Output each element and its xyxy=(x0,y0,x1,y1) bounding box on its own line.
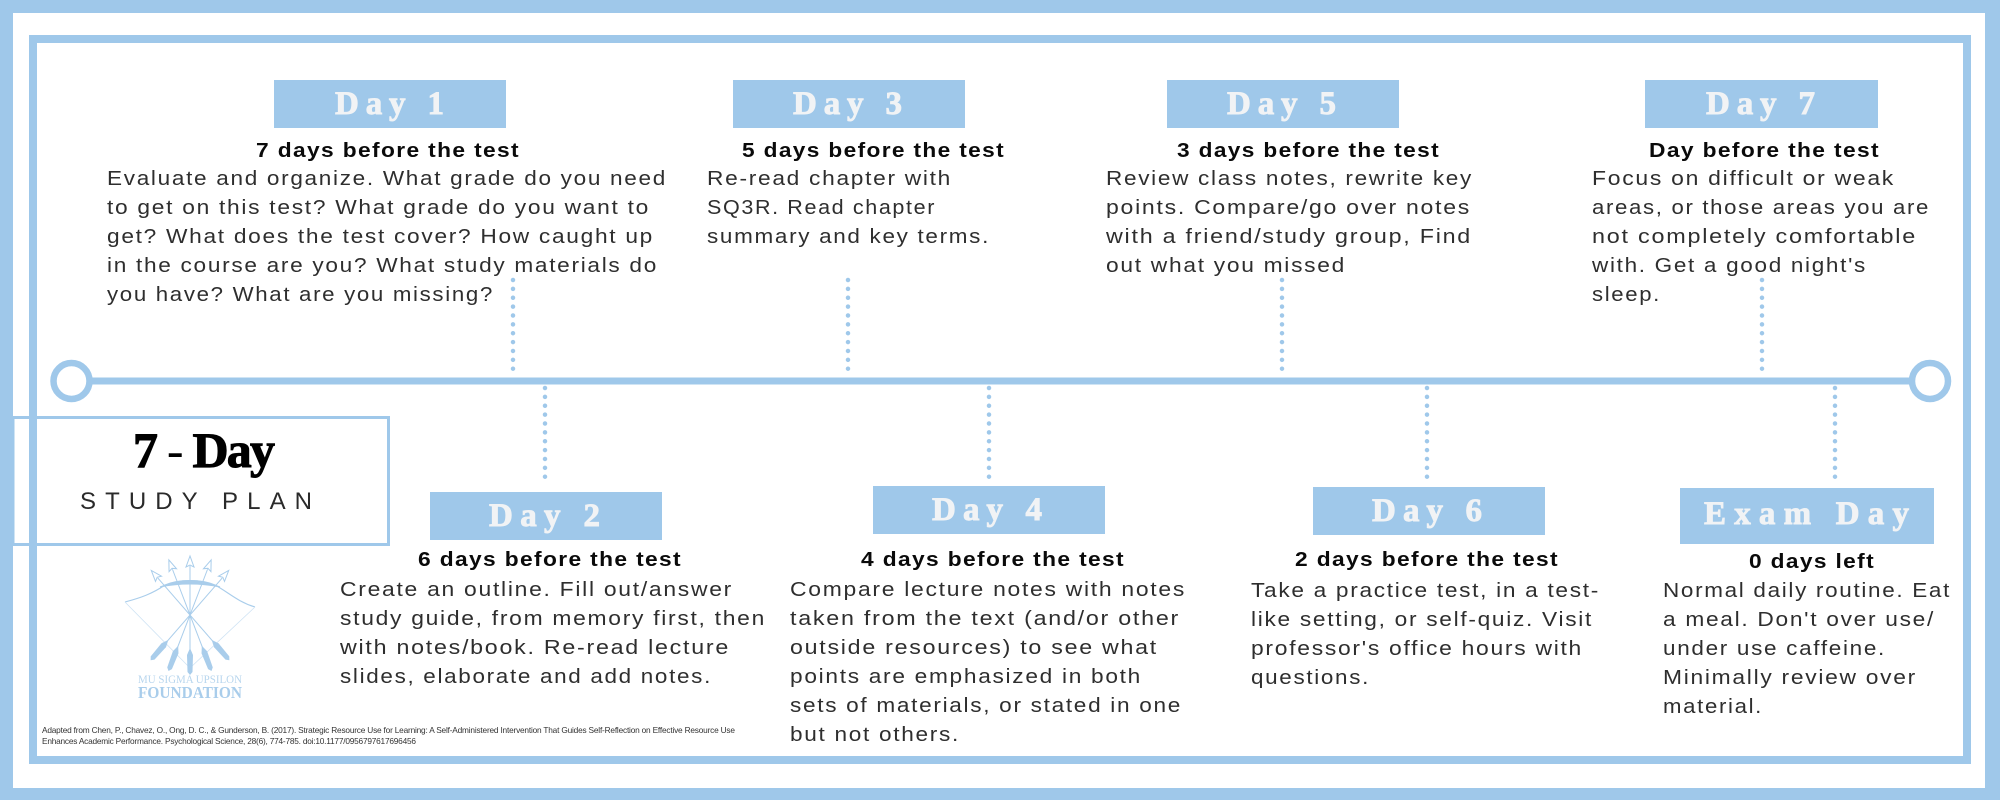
connector: Day 2 xyxy=(543,388,547,478)
logo: Mu Sigma Upsilon Foundation xyxy=(125,556,255,702)
connector: Day 6 xyxy=(1425,388,1429,478)
panel: Day 1 xyxy=(107,80,667,306)
body: Day 2 xyxy=(339,579,766,688)
badge: Exam Day: Exam Day xyxy=(1704,496,1910,532)
body: Day 1: get? What does the test cover? How caught up xyxy=(107,226,654,248)
badge: Day 3: Day 3 xyxy=(793,86,902,122)
badge: Day 1: Day 1 xyxy=(335,86,444,122)
connector: Day 1 xyxy=(511,280,515,370)
badge: Day 4: Day 4 xyxy=(932,492,1042,528)
body: Day 1: Evaluate and organize. What grade do you need xyxy=(107,168,667,190)
badge: Day 5: Day 5 xyxy=(1227,86,1336,122)
timeline xyxy=(54,363,1948,399)
title box: 7-Day Study Plan xyxy=(13,418,388,544)
logo text: MU SIGMA UPSILON xyxy=(138,672,242,686)
body: Day 4: Compare lecture notes with notes xyxy=(790,579,1186,601)
body: Day 5: out what you missed xyxy=(1106,255,1346,277)
badge: Day 3 xyxy=(733,80,965,128)
body: Day 2: with notes/book. Re-read lecture xyxy=(339,637,730,659)
body: Day 2: study guide, from memory first, then xyxy=(340,608,766,630)
citation: Enhances Academic Performance. Psychological Science, 28(6), 774-785. doi:10.1177/0956797617696456 xyxy=(42,736,416,746)
subheading: Day 5: 3 days before the test xyxy=(1177,140,1440,162)
subheading: Day 7: Day before the test xyxy=(1649,140,1880,162)
body: Day 7 xyxy=(1591,168,1930,306)
panel: Day 2 xyxy=(339,492,766,688)
subheading: Day 3: 5 days before the test xyxy=(742,140,1005,162)
body: Day 6: questions. xyxy=(1251,667,1370,689)
body: Day 6: professor's office hours with xyxy=(1251,638,1583,660)
logo text xyxy=(138,672,242,702)
body: Exam Day: under use caffeine. xyxy=(1663,638,1886,660)
body: Day 3 xyxy=(707,168,990,248)
badge: Day 6: Day 6 xyxy=(1372,493,1482,529)
badge: Day 7: Day 7 xyxy=(1706,86,1815,122)
body: Exam Day: Normal daily routine. Eat xyxy=(1663,580,1951,602)
body: Day 7: areas, or those areas you are xyxy=(1592,197,1930,219)
subheading: Day 4: 4 days before the test xyxy=(861,549,1125,571)
body: Day 4 xyxy=(790,579,1186,746)
body: Exam Day: material. xyxy=(1663,696,1763,718)
body: Day 1 xyxy=(107,168,667,306)
citation xyxy=(42,725,735,746)
subheading: Day 6: 2 days before the test xyxy=(1295,549,1559,571)
body: Day 6: like setting, or self-quiz. Visit xyxy=(1251,609,1593,631)
subtitle: Study Plan: STUDY PLAN xyxy=(80,488,312,515)
connector: Day 5 xyxy=(1280,280,1284,370)
panel: Day 6 xyxy=(1251,487,1600,689)
panel: Day 7 xyxy=(1591,80,1930,306)
connector: Day 3 xyxy=(846,280,850,370)
body: Day 7: Focus on difficult or weak xyxy=(1592,168,1895,190)
timeline start ring xyxy=(54,363,90,399)
body: Day 5: points. Compare/go over notes xyxy=(1106,197,1471,219)
badge: Day 2: Day 2 xyxy=(489,498,600,534)
body: Day 3: SQ3R. Read chapter xyxy=(707,197,936,219)
title: 7 - Day: 7 - Day xyxy=(133,422,275,478)
body: Exam Day: a meal. Don't over use/ xyxy=(1663,609,1935,631)
body: Day 7: with. Get a good night's xyxy=(1591,255,1867,277)
body: Day 7: sleep. xyxy=(1592,284,1661,306)
subheading: Day 1: 7 days before the test xyxy=(256,140,520,162)
subheading: Exam Day: 0 days left xyxy=(1749,551,1875,573)
body: Day 6 xyxy=(1251,580,1600,689)
icon: bow xyxy=(125,580,255,668)
panel: Day 3 xyxy=(707,80,1005,248)
body: Day 2: Create an outline. Fill out/answer xyxy=(340,579,733,601)
body: Day 5 xyxy=(1105,168,1473,277)
body: Day 4: taken from the text (and/or other xyxy=(790,608,1180,630)
badge: Day 7 xyxy=(1645,80,1878,128)
badge: Day 4 xyxy=(873,486,1105,534)
panel: Day 4 xyxy=(790,486,1186,746)
body: Day 6: Take a practice test, in a test- xyxy=(1251,580,1600,602)
badge: Day 2 xyxy=(430,492,662,540)
body: Day 1: in the course are you? What study materials do xyxy=(107,255,658,277)
body: Day 4: but not others. xyxy=(790,724,960,746)
body: Exam Day: Minimally review over xyxy=(1663,667,1917,689)
logo text: FOUNDATION xyxy=(138,683,242,702)
icon: arrows xyxy=(148,556,232,675)
body: Day 3: summary and key terms. xyxy=(707,226,990,248)
subheading: Day 2: 6 days before the test xyxy=(418,549,682,571)
connector: Exam Day xyxy=(1833,388,1837,478)
panel: Day 5 xyxy=(1105,80,1473,277)
badge: Day 6 xyxy=(1313,487,1545,535)
body: Day 2: slides, elaborate and add notes. xyxy=(340,666,712,688)
badge: Day 1 xyxy=(274,80,506,128)
body: Day 4: sets of materials, or stated in one xyxy=(790,695,1182,717)
body: Day 1: to get on this test? What grade do you want to xyxy=(107,197,650,219)
body: Day 1: you have? What are you missing? xyxy=(107,284,494,306)
citation: Adapted from Chen, P., Chavez, O., Ong, D. C., & Gunderson, B. (2017). Strategic Resource Use for Learning: A Self-Administered Intervention That Guides Self-Reflection on Effective Resource Use xyxy=(42,725,735,735)
body: Exam Day xyxy=(1663,580,1951,718)
timeline end ring xyxy=(1912,363,1948,399)
body: Day 7: not completely comfortable xyxy=(1592,226,1917,248)
badge: Exam Day xyxy=(1680,488,1934,544)
body: Day 5: Review class notes, rewrite key xyxy=(1106,168,1473,190)
body: Day 3: Re-read chapter with xyxy=(707,168,952,190)
body: Day 5: with a friend/study group, Find xyxy=(1105,226,1472,248)
connector: Day 7 xyxy=(1760,280,1764,370)
connector: Day 4 xyxy=(987,388,991,478)
badge: Day 5 xyxy=(1167,80,1399,128)
body: Day 4: points are emphasized in both xyxy=(790,666,1142,688)
panel: Exam Day xyxy=(1663,488,1951,718)
body: Day 4: outside resources) to see what xyxy=(790,637,1158,659)
